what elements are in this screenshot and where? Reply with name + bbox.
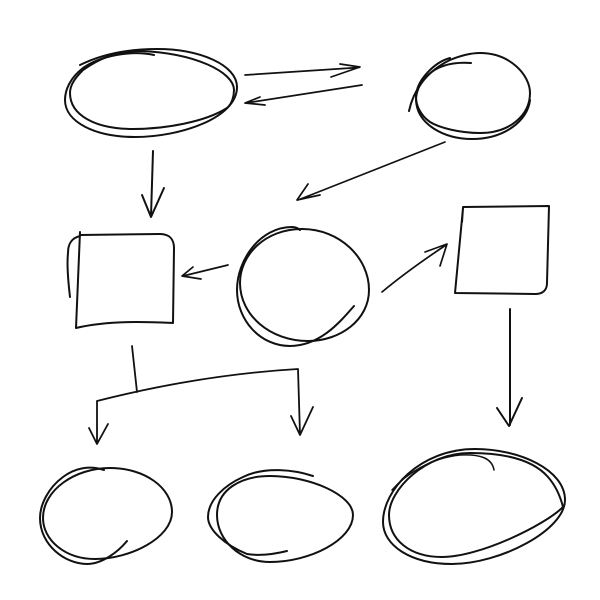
square: right xyxy=(455,206,549,294)
arrow: top right to centre xyxy=(297,142,445,200)
square: left xyxy=(68,232,174,328)
arrow: top right to top left xyxy=(245,85,362,105)
ellipse: top left xyxy=(65,49,237,137)
arrow: centre to left square xyxy=(182,265,228,279)
branching arrow: left square to lower ellipses xyxy=(89,346,313,444)
ellipse: bottom left xyxy=(40,468,172,564)
arrow: top left to top right xyxy=(245,64,360,77)
ellipse: top right xyxy=(409,53,530,139)
ellipse: bottom centre xyxy=(208,470,353,562)
arrow: right square down xyxy=(497,309,522,426)
arrow: top left to square xyxy=(142,151,164,217)
circle: centre xyxy=(237,227,369,346)
ellipse: bottom right xyxy=(383,449,565,564)
arrow: centre to right square xyxy=(382,244,447,292)
